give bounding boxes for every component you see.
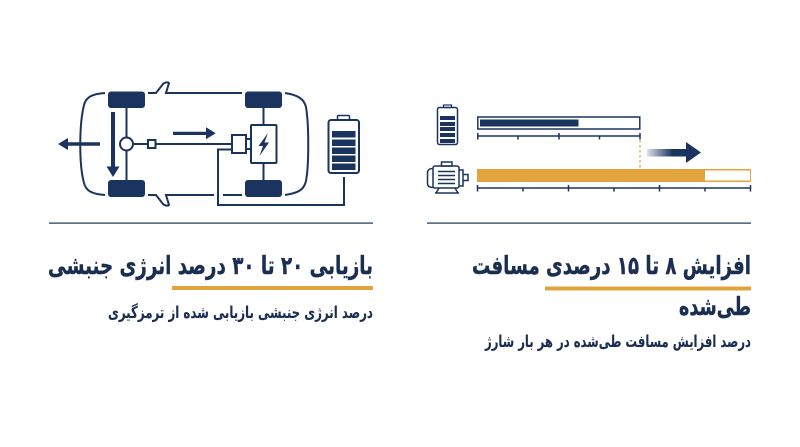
arrow: downward (106, 112, 120, 177)
panel: regenerative braking (48, 82, 373, 323)
icon: small battery (438, 105, 458, 144)
heading line 2: طی‌شده (679, 292, 751, 321)
diagram: car chassis (80, 82, 344, 206)
divider (427, 222, 751, 224)
heading underline (172, 286, 373, 290)
panel: extended range (427, 105, 751, 352)
car body outline (80, 82, 308, 206)
scale: motor bar ticks (477, 185, 751, 192)
heading line 1: افزایش ۸ تا ۱۵ درصدی مسافت (472, 251, 751, 281)
axles and driveshaft (120, 108, 264, 180)
icon: electric motor (428, 162, 468, 193)
divider (49, 222, 373, 224)
scale: battery bar ticks (478, 133, 640, 140)
arrow: energy flow right (173, 127, 216, 139)
bar: battery range (478, 117, 640, 129)
heading: بازیابی ۲۰ تا ۳۰ درصد انرژی جنبشی (48, 251, 373, 281)
bar: motor range (477, 169, 751, 182)
arrow: forward to the left (58, 138, 100, 150)
heading underline (545, 286, 751, 290)
icon: battery (328, 116, 359, 173)
description: درصد انرژی جنبشی بازیابی شده از ترمزگیری (108, 302, 373, 323)
icon: electric motor with bolt (232, 125, 276, 163)
dashed guide line (639, 140, 641, 169)
arrow: range increase (647, 142, 701, 163)
icon: wheels (108, 92, 282, 197)
wiring to battery (218, 150, 344, 205)
